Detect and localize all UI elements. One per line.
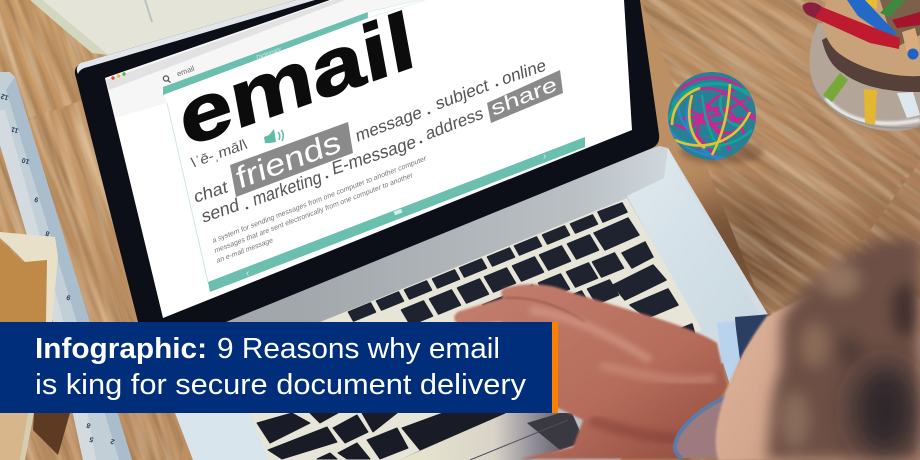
definitions: an e-mail message <box>216 237 274 265</box>
ruler numbers: 8 <box>86 421 92 429</box>
icon: speaker <box>264 129 283 143</box>
share tag: share <box>489 73 559 121</box>
keys upper <box>348 203 695 338</box>
shirt cuff and sleeve <box>717 314 772 385</box>
glasses <box>675 397 727 458</box>
keyboard well <box>250 198 702 460</box>
dictionary bar: Dictionary <box>256 46 282 62</box>
blue pencil <box>847 0 897 37</box>
keys lower <box>257 413 505 459</box>
word cloud: message <box>354 101 423 146</box>
ruler numbers: 12 <box>0 92 10 101</box>
search text: email <box>176 64 196 78</box>
headword: email: email <box>172 0 421 164</box>
title text <box>35 333 527 401</box>
laptop <box>75 0 770 460</box>
wooden pencil <box>902 28 920 55</box>
leather pouch on the left <box>0 232 70 460</box>
laptop base <box>135 146 770 460</box>
word cloud: chat <box>193 176 229 207</box>
skin <box>716 290 920 460</box>
word cloud: address <box>424 102 485 144</box>
bottom teal bar <box>208 137 585 292</box>
ruler on the left <box>0 72 132 460</box>
title banner <box>0 322 558 413</box>
title text: Infographic: <box>35 333 207 365</box>
red pencil <box>803 3 900 49</box>
dark under bowl <box>822 30 920 92</box>
word cloud: marketing <box>251 167 323 210</box>
ruler numbers: 2 <box>110 437 116 445</box>
trackpad area <box>400 413 585 460</box>
orange accent bar <box>552 322 558 413</box>
ruler numbers: 10 <box>21 156 31 165</box>
ruler numbers: 9 <box>34 195 40 203</box>
search icon <box>163 76 170 82</box>
rubber band ball <box>668 72 764 164</box>
palm rest left <box>175 413 270 460</box>
content panel outline <box>167 103 208 282</box>
ruler numbers: 9 <box>66 293 72 301</box>
word cloud: subject <box>434 74 490 114</box>
title text: is king for secure document delivery <box>35 369 527 401</box>
hair shadow <box>853 364 917 456</box>
title text: 9 Reasons why email <box>217 333 500 365</box>
dark pencil holder shadow <box>880 0 920 48</box>
glass jar <box>809 23 920 131</box>
red pencil right <box>892 12 920 28</box>
word cloud: send <box>200 194 240 227</box>
large keys: power, delete, backslash, return, shift <box>594 203 695 338</box>
hair <box>766 239 920 460</box>
word cloud: online <box>501 54 547 89</box>
pencils in jar <box>823 73 848 102</box>
dictionary bar <box>163 0 425 95</box>
share tag <box>487 70 563 123</box>
notebook at top-left <box>30 0 300 55</box>
friends tag: friends <box>233 125 344 196</box>
definitions: a system for sending messages from one computer to another computer <box>212 155 428 245</box>
person's head <box>716 239 920 460</box>
ruler numbers <box>0 92 116 445</box>
palm rest right <box>627 148 760 334</box>
ruler numbers: 5 <box>89 435 95 443</box>
ruler numbers: 11 <box>10 125 20 134</box>
bottom teal bar: › <box>543 151 546 162</box>
green pencil <box>880 0 905 17</box>
wooden bowl <box>823 0 920 76</box>
pronunciation: \ˈē-ˌmāl\ <box>190 135 248 171</box>
lid bezel <box>75 0 659 322</box>
definitions: messages that are sent electronically from one computer to another <box>214 172 414 255</box>
window chrome <box>105 0 420 118</box>
hand on keyboard <box>454 284 727 459</box>
ruler numbers: 8 <box>45 229 51 237</box>
word cloud <box>193 54 563 227</box>
friends tag <box>230 122 353 197</box>
bottom teal bar: ‹ <box>246 268 249 279</box>
pencil jar at top-right <box>803 0 920 131</box>
screen <box>105 0 632 318</box>
word cloud: E-message <box>331 131 417 179</box>
yellow pencil top <box>863 0 877 10</box>
